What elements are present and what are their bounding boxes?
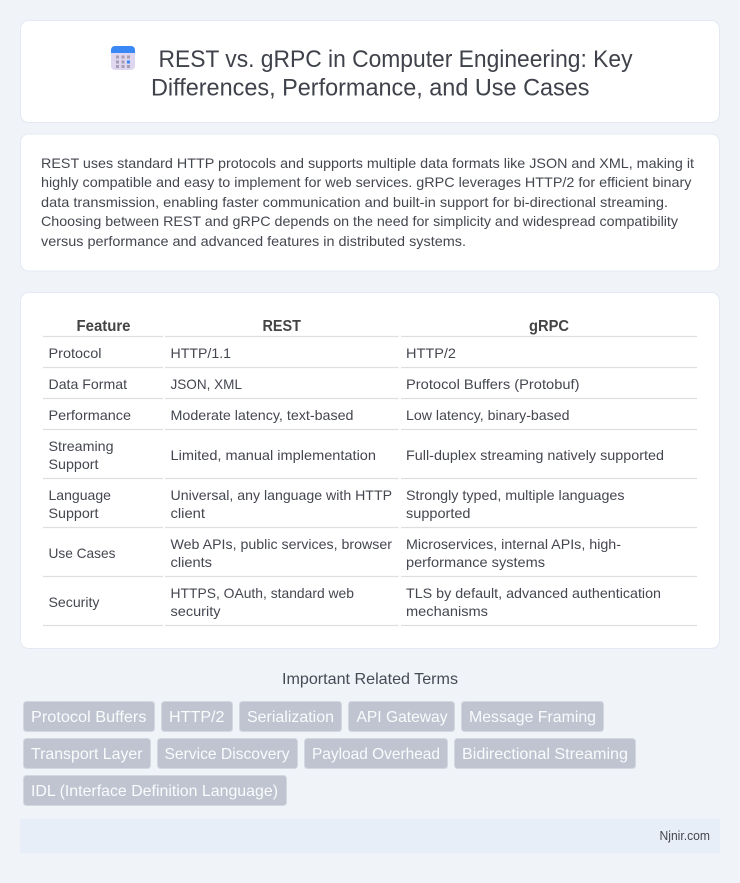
panel: header bbox=[20, 20, 720, 122]
icon: calendar bbox=[111, 46, 135, 70]
tags: related terms bbox=[24, 702, 636, 806]
row: language support bbox=[48, 487, 624, 521]
row: data format: Data Format bbox=[48, 376, 127, 392]
row: security bbox=[48, 585, 661, 619]
footer: Njnir.com bbox=[660, 828, 710, 843]
tags: related terms: HTTP/2 bbox=[169, 709, 225, 726]
row: use cases bbox=[48, 536, 621, 570]
tags: related terms: Message Framing bbox=[469, 709, 596, 726]
row: performance bbox=[48, 407, 570, 423]
row: language support: client bbox=[170, 505, 205, 521]
row: protocol bbox=[48, 345, 456, 361]
row: security: TLS by default, advanced authentication bbox=[406, 585, 661, 601]
row: use cases: Use Cases bbox=[48, 545, 116, 561]
text block: summary: Choosing between REST and gRPC depends on the need for simplicity and widespread compatibility bbox=[41, 213, 678, 229]
tags: related terms: Serialization bbox=[247, 709, 334, 726]
tags: related terms: API Gateway bbox=[356, 709, 448, 726]
heading: important related terms: Important Related Terms bbox=[282, 671, 458, 688]
text block: summary: REST uses standard HTTP protocols and supports multiple data formats like JSON and XML, making it bbox=[41, 155, 694, 171]
row: language support: supported bbox=[406, 505, 470, 521]
text block: summary: data transmission, enabling faster communication and built-in support for bi-directional streaming. bbox=[41, 194, 668, 210]
title: REST vs. gRPC in Computer Engineering: Key bbox=[158, 46, 632, 73]
table header row: REST bbox=[262, 318, 301, 335]
row: language support: Universal, any language with HTTP bbox=[170, 487, 392, 503]
text block: summary bbox=[41, 155, 694, 249]
row: use cases: clients bbox=[170, 554, 212, 570]
row: data format bbox=[48, 376, 580, 392]
tags: related terms: Protocol Buffers bbox=[31, 709, 146, 726]
text block: summary: highly compatible and easy to implement for web services. gRPC leverages HTTP/2 for efficient binary bbox=[41, 174, 692, 190]
title: Differences, Performance, and Use Cases bbox=[151, 74, 590, 102]
row: security: security bbox=[170, 603, 220, 619]
row: security: mechanisms bbox=[406, 603, 488, 619]
table header row bbox=[76, 318, 569, 335]
row: use cases: performance systems bbox=[406, 554, 545, 570]
row: performance: Performance bbox=[48, 407, 131, 423]
tags: related terms: Payload Overhead bbox=[312, 746, 440, 763]
row: data format: JSON, XML bbox=[170, 376, 242, 392]
row: use cases: Microservices, internal APIs, high- bbox=[406, 536, 621, 552]
footer bbox=[20, 819, 720, 853]
row: security: HTTPS, OAuth, standard web bbox=[170, 585, 354, 601]
row: security: Security bbox=[48, 594, 100, 610]
row: language support: Language bbox=[48, 487, 111, 503]
title bbox=[151, 46, 632, 102]
row: use cases: Web APIs, public services, browser bbox=[170, 536, 392, 552]
row: streaming support: Full-duplex streaming natively supported bbox=[406, 447, 664, 463]
panel: comparison table bbox=[20, 292, 720, 648]
row: streaming support: Streaming bbox=[48, 438, 114, 454]
table header row: gRPC bbox=[529, 318, 569, 335]
row: protocol: Protocol bbox=[48, 345, 102, 361]
table header row: Feature bbox=[76, 318, 131, 335]
tags: related terms: Service Discovery bbox=[164, 746, 290, 763]
panel: description bbox=[20, 134, 720, 271]
row: protocol: HTTP/2 bbox=[406, 345, 456, 361]
row: protocol: HTTP/1.1 bbox=[170, 345, 231, 361]
row: streaming support: Limited, manual implementation bbox=[170, 447, 376, 463]
row: streaming support bbox=[48, 438, 664, 472]
row: performance: Moderate latency, text-based bbox=[170, 407, 354, 423]
row: data format: Protocol Buffers (Protobuf) bbox=[406, 376, 580, 392]
row: performance: Low latency, binary-based bbox=[406, 407, 570, 423]
row: streaming support: Support bbox=[48, 456, 99, 472]
row: language support: Strongly typed, multiple languages bbox=[406, 487, 624, 503]
tags: related terms: Transport Layer bbox=[31, 746, 143, 763]
tags: related terms: Bidirectional Streaming bbox=[462, 746, 628, 763]
tags: related terms: IDL (Interface Definition Language) bbox=[31, 783, 278, 800]
text block: summary: versus performance and advanced features in distributed systems. bbox=[41, 233, 466, 249]
row: language support: Support bbox=[48, 505, 99, 521]
